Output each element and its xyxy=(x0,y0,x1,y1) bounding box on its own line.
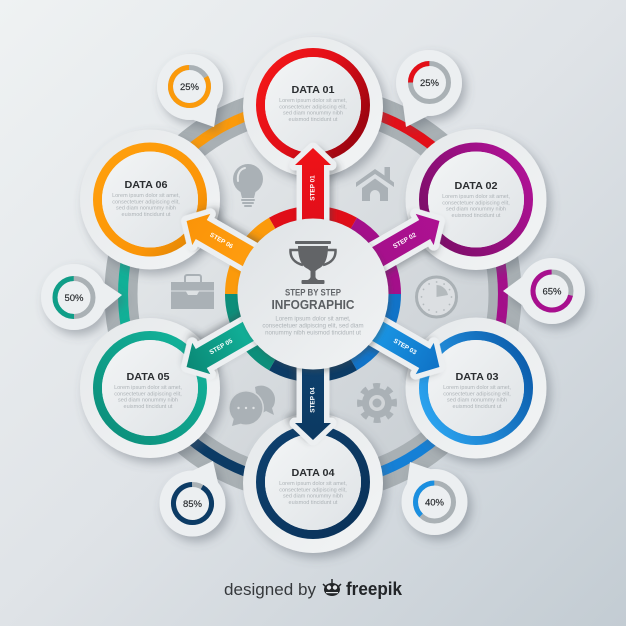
callout: 40% blue xyxy=(402,462,468,535)
text block: data 02: euismod tincidunt ut xyxy=(452,213,501,219)
text block: data 05: Lorem ipsum dolor sit amet, xyxy=(114,385,182,391)
arrow: step 02 xyxy=(358,205,448,279)
inner coloured ring xyxy=(232,213,394,375)
text block: data 03: euismod tincidunt ut xyxy=(453,404,502,410)
text block: data 06: Lorem ipsum dolor sit amet, xyxy=(112,193,180,199)
panel: data 01 xyxy=(243,37,383,177)
callout: 50% teal: 50% xyxy=(64,293,84,304)
arrow labels xyxy=(208,175,418,413)
panel: data 03 xyxy=(406,318,546,458)
logo wordmark: freepik xyxy=(346,579,403,599)
heading: data 01: DATA 01 xyxy=(292,84,335,96)
text block: data 04 xyxy=(279,481,347,506)
icon: light bulb xyxy=(233,164,263,207)
text block: data 04: consectetuer adipiscing elit, xyxy=(279,487,347,493)
callout: 25% red: 25% xyxy=(420,78,440,89)
arrow: step 04 xyxy=(295,356,331,440)
icon: chat bubbles xyxy=(228,386,275,426)
arrow: step 05 xyxy=(178,309,268,383)
text block: centre description: nonummy nibh euismod tincidunt ut xyxy=(265,330,361,336)
panel: data 06 xyxy=(80,130,220,270)
text block: data 04: sed diam nonummy nibh xyxy=(283,494,343,500)
footer: designed by freepik xyxy=(224,579,403,599)
callout: 25% orange: 25% xyxy=(180,82,200,93)
heading: data 03: DATA 03 xyxy=(456,371,499,383)
arrow labels: STEP 01 xyxy=(310,175,316,201)
icon: gear xyxy=(360,386,394,420)
text block: data 02: sed diam nonummy nibh xyxy=(446,206,506,212)
icon: briefcase xyxy=(171,275,214,309)
text block: data 06: sed diam nonummy nibh xyxy=(116,206,176,212)
icon: trophy xyxy=(290,241,336,284)
callout: 25% red xyxy=(396,50,462,127)
heading: infographic: INFOGRAPHIC xyxy=(272,297,355,312)
arrow: step 03 xyxy=(358,309,448,383)
callout: 40% blue: 40% xyxy=(425,498,445,508)
arrow labels: STEP 04 xyxy=(310,387,316,413)
heading: data 04: DATA 04 xyxy=(292,467,335,479)
callout: 50% teal xyxy=(41,264,122,330)
text block: data 01: Lorem ipsum dolor sit amet, xyxy=(279,98,347,104)
text block: centre description: consectetuer adipiscing elit, sed diam xyxy=(262,322,364,330)
callout: 65% purple: 65% xyxy=(542,286,562,298)
text block: data 06 xyxy=(112,193,180,218)
text block: data 02 xyxy=(442,194,510,219)
text block: data 03: consectetuer adipiscing elit, xyxy=(443,391,511,397)
text block: data 01 xyxy=(279,98,347,123)
text block: centre description xyxy=(262,316,364,336)
panel: data 04 xyxy=(243,413,383,553)
outer grey ring band xyxy=(121,102,505,486)
icon: clock xyxy=(416,277,456,317)
panel: data 05 xyxy=(80,318,220,458)
heading: step by step: STEP BY STEP xyxy=(285,288,342,298)
text block: data 05: consectetuer adipiscing elit, xyxy=(114,391,182,397)
panel: centre circle xyxy=(238,218,388,370)
text block: data 05: sed diam nonummy nibh xyxy=(118,398,178,404)
text block: centre description: Lorem ipsum dolor sit amet, xyxy=(275,316,351,322)
icon: house xyxy=(356,167,394,201)
text block: data 01: consectetuer adipiscing elit, xyxy=(279,104,347,110)
text block: data 02: consectetuer adipiscing elit, xyxy=(442,200,510,206)
callout: 65% purple xyxy=(503,258,585,324)
text block: data 05: euismod tincidunt ut xyxy=(124,404,173,410)
text block: data 02: Lorem ipsum dolor sit amet, xyxy=(442,194,510,200)
text block: data 01: euismod tincidunt ut xyxy=(289,117,338,123)
inner backdrop disc xyxy=(137,118,489,470)
text block: data 04: euismod tincidunt ut xyxy=(289,500,338,506)
text block: data 03: sed diam nonummy nibh xyxy=(447,398,507,404)
callout: 85% navy: 85% xyxy=(183,499,203,510)
text block: data 06: consectetuer adipiscing elit, xyxy=(112,199,180,205)
text block: data 05 xyxy=(114,385,182,410)
text block: data 04: Lorem ipsum dolor sit amet, xyxy=(279,481,347,487)
callout: 85% navy xyxy=(160,461,226,536)
icon: freepik logo xyxy=(323,579,341,596)
text block: data 03 xyxy=(443,385,511,410)
arrow: step 01 xyxy=(295,148,331,232)
text block: data 01: sed diam nonummy nibh xyxy=(283,110,343,116)
panel: data 02 xyxy=(406,129,546,270)
heading: data 05: DATA 05 xyxy=(126,371,170,383)
heading: data 02: DATA 02 xyxy=(454,180,498,192)
callout: 25% orange xyxy=(157,54,223,127)
arrow labels: STEP 02 xyxy=(392,231,418,250)
arrow labels: STEP 03 xyxy=(392,338,418,357)
text block: data 06: euismod tincidunt ut xyxy=(122,212,171,218)
heading: data 06: DATA 06 xyxy=(124,179,168,191)
text block: data 03: Lorem ipsum dolor sit amet, xyxy=(443,385,511,391)
outer coloured ring segments xyxy=(123,104,503,484)
arrow: step 06 xyxy=(178,205,268,279)
arrow labels: STEP 06 xyxy=(208,232,234,251)
footer: designed by freepik: designed by xyxy=(224,580,316,599)
arrow labels: STEP 05 xyxy=(208,337,234,356)
